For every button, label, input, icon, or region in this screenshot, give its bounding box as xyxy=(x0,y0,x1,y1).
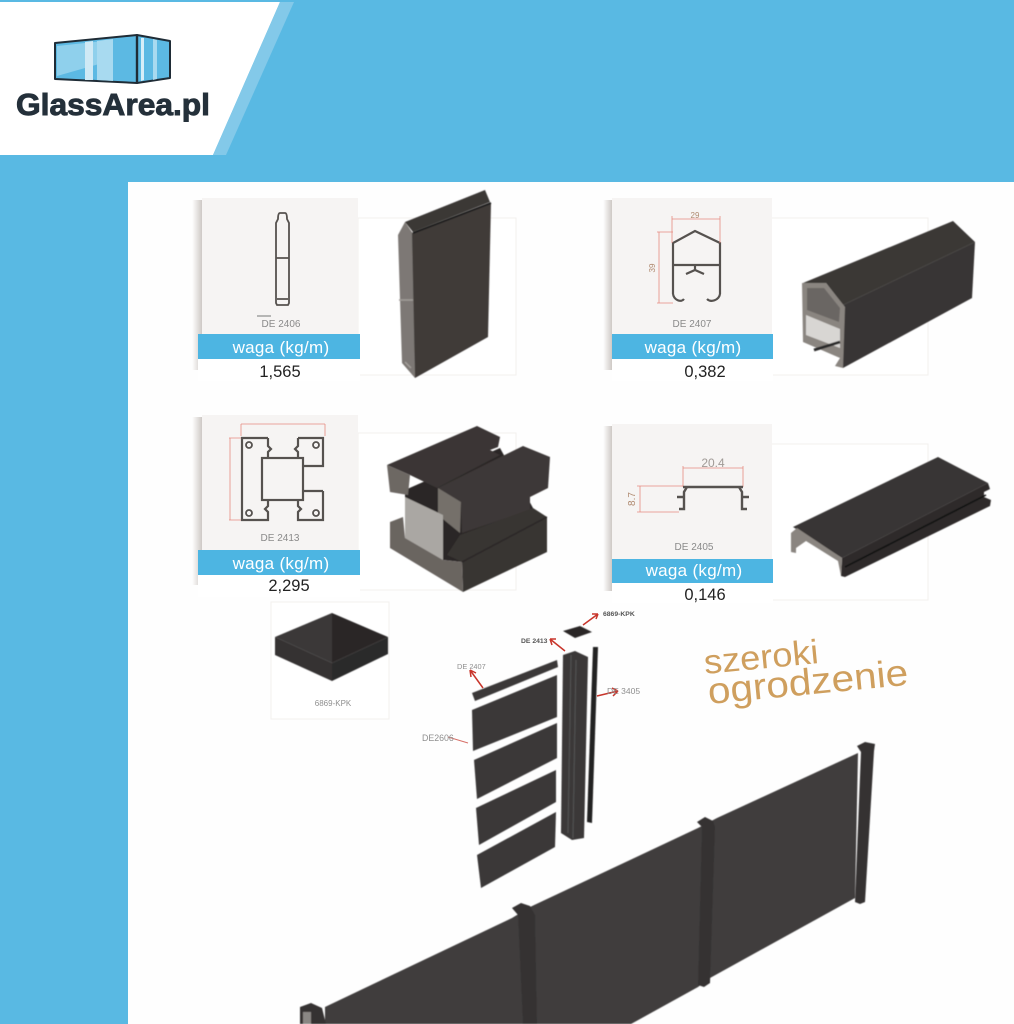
panel: DE 2406 xyxy=(192,190,516,381)
left shadow xyxy=(192,417,203,585)
exploded parts xyxy=(472,626,598,888)
weight bar xyxy=(612,334,773,359)
assembled fence xyxy=(300,742,875,1024)
model code xyxy=(257,316,301,330)
product render xyxy=(791,457,991,577)
panel: DE 2413 xyxy=(192,415,550,597)
weight value: 0,382 xyxy=(684,363,726,381)
weight label: waga (kg/m) xyxy=(232,338,329,357)
white logo panel xyxy=(0,2,280,155)
weight label: waga (kg/m) xyxy=(645,561,742,580)
frame behind product xyxy=(770,444,928,600)
drawing card xyxy=(202,198,358,336)
icon: glass container xyxy=(55,35,170,83)
drawing card xyxy=(612,198,772,336)
exploded fence diagram xyxy=(422,611,640,888)
value background xyxy=(198,359,360,381)
product render xyxy=(802,221,975,368)
slanted heading xyxy=(702,633,910,712)
profile drawing xyxy=(276,213,289,305)
left shadow xyxy=(192,200,203,370)
weight label: waga (kg/m) xyxy=(232,554,329,573)
panel: cap 6869-KPK xyxy=(271,602,389,719)
heading line 1: szeroki xyxy=(702,633,820,682)
model code: DE 2407 xyxy=(673,319,712,330)
frame xyxy=(271,602,389,719)
profile drawing with dimensions: 8.7 xyxy=(627,492,638,506)
left post opening xyxy=(303,1012,311,1024)
cap render xyxy=(275,613,388,681)
weight bar xyxy=(198,334,360,359)
left shadow xyxy=(603,200,613,370)
fence panels xyxy=(325,753,858,1024)
product render xyxy=(398,190,491,378)
drawing card xyxy=(612,424,772,561)
value background xyxy=(612,583,773,603)
frame behind product xyxy=(358,218,516,375)
part labels: DE 2413 xyxy=(521,638,548,645)
light slanted band xyxy=(213,2,294,155)
arrows xyxy=(448,614,618,743)
profile drawing with dimensions: 39 xyxy=(648,263,657,272)
white content panel xyxy=(128,182,1014,1024)
profile drawing with dimensions: 29 xyxy=(691,211,700,220)
cap label: 6869-KPK xyxy=(315,699,352,708)
weight bar xyxy=(612,559,773,583)
part labels: DE 3405 xyxy=(607,686,640,696)
part labels: DE2606 xyxy=(422,733,454,743)
panel: DE 2407 xyxy=(603,198,975,381)
weight label: waga (kg/m) xyxy=(644,338,741,357)
part labels xyxy=(422,611,640,743)
model code: DE 2405 xyxy=(675,542,714,553)
product render xyxy=(387,426,550,592)
model code: DE 2406 xyxy=(262,319,301,330)
weight value: 1,565 xyxy=(259,363,301,381)
weight value: 0,146 xyxy=(684,586,726,604)
heading line 2: ogrodzenie xyxy=(706,652,910,712)
profile drawing with dimensions xyxy=(648,211,720,303)
profile drawing with dimensions xyxy=(229,424,325,520)
drawing card xyxy=(202,415,358,552)
header: logo panel xyxy=(0,2,294,155)
panel: DE 2405 xyxy=(603,424,991,604)
left shadow xyxy=(603,426,613,591)
profile drawing with dimensions: 20.4 xyxy=(701,456,725,470)
posts xyxy=(300,742,875,1024)
weight bar xyxy=(198,550,360,575)
frame behind product xyxy=(770,218,928,375)
value background xyxy=(612,359,773,381)
model code: DE 2413 xyxy=(261,533,300,544)
value background xyxy=(198,575,360,597)
weight value: 2,295 xyxy=(268,577,310,595)
logo wordmark: GlassArea.pl xyxy=(16,87,210,122)
profile drawing with dimensions xyxy=(627,456,749,512)
part labels: DE 2407 xyxy=(457,662,486,671)
frame behind product xyxy=(358,433,516,590)
part labels: 6869-KPK xyxy=(603,611,635,618)
